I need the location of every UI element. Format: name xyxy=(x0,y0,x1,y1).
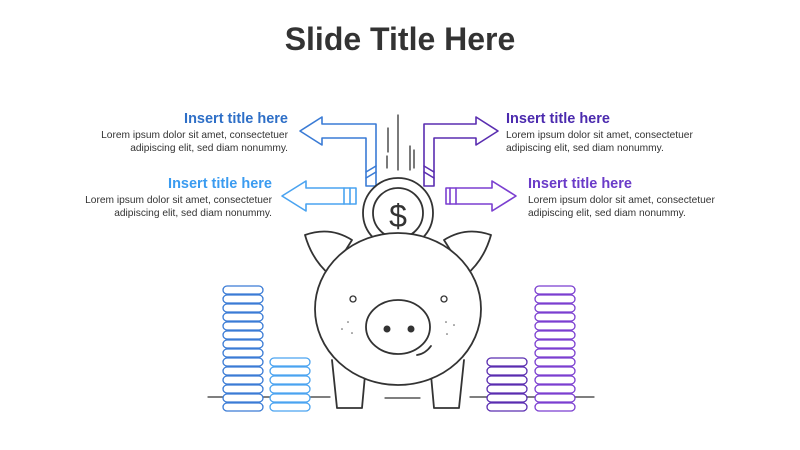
text block: bottom right: Lorem ipsum dolor sit amet, consectetuer xyxy=(528,195,715,206)
title: Slide Title Here xyxy=(285,21,515,57)
text block: top right: adipiscing elit, sed diam nonummy. xyxy=(506,143,664,154)
text block: top right: Insert title here xyxy=(506,111,610,127)
pig xyxy=(305,178,491,408)
arrow: bottom left xyxy=(282,181,356,211)
text block: bottom right: adipiscing elit, sed diam nonummy. xyxy=(528,208,686,219)
coin stack: right big xyxy=(535,286,575,411)
coin stack: left small xyxy=(270,358,310,411)
text block: bottom right xyxy=(528,176,715,219)
ground line xyxy=(208,397,594,398)
coin stack: right small xyxy=(487,358,527,411)
arrow: bottom right xyxy=(446,181,516,211)
legs xyxy=(332,360,365,408)
snout xyxy=(366,300,430,354)
illustration: $ xyxy=(389,198,407,234)
head xyxy=(315,233,481,385)
text block: bottom right: Insert title here xyxy=(528,176,632,192)
text block: bottom left: Lorem ipsum dolor sit amet, consectetuer xyxy=(85,195,272,206)
arrow: top right xyxy=(424,117,498,186)
text block: top left xyxy=(101,111,288,154)
text block: top right xyxy=(506,111,693,154)
text block: bottom left: adipiscing elit, sed diam nonummy. xyxy=(114,208,272,219)
text block: top left: Insert title here xyxy=(184,111,288,127)
ears xyxy=(305,231,352,275)
text block: top right: Lorem ipsum dolor sit amet, consectetuer xyxy=(506,130,693,141)
text block: bottom left xyxy=(85,176,272,219)
text block: top left: Lorem ipsum dolor sit amet, consectetuer xyxy=(101,130,288,141)
text block: bottom left: Insert title here xyxy=(168,176,272,192)
text block: top left: adipiscing elit, sed diam nonummy. xyxy=(130,143,288,154)
coin stack: left big xyxy=(223,286,263,411)
arrow: top left xyxy=(300,117,376,186)
coin xyxy=(363,178,433,248)
motion lines xyxy=(387,115,414,170)
